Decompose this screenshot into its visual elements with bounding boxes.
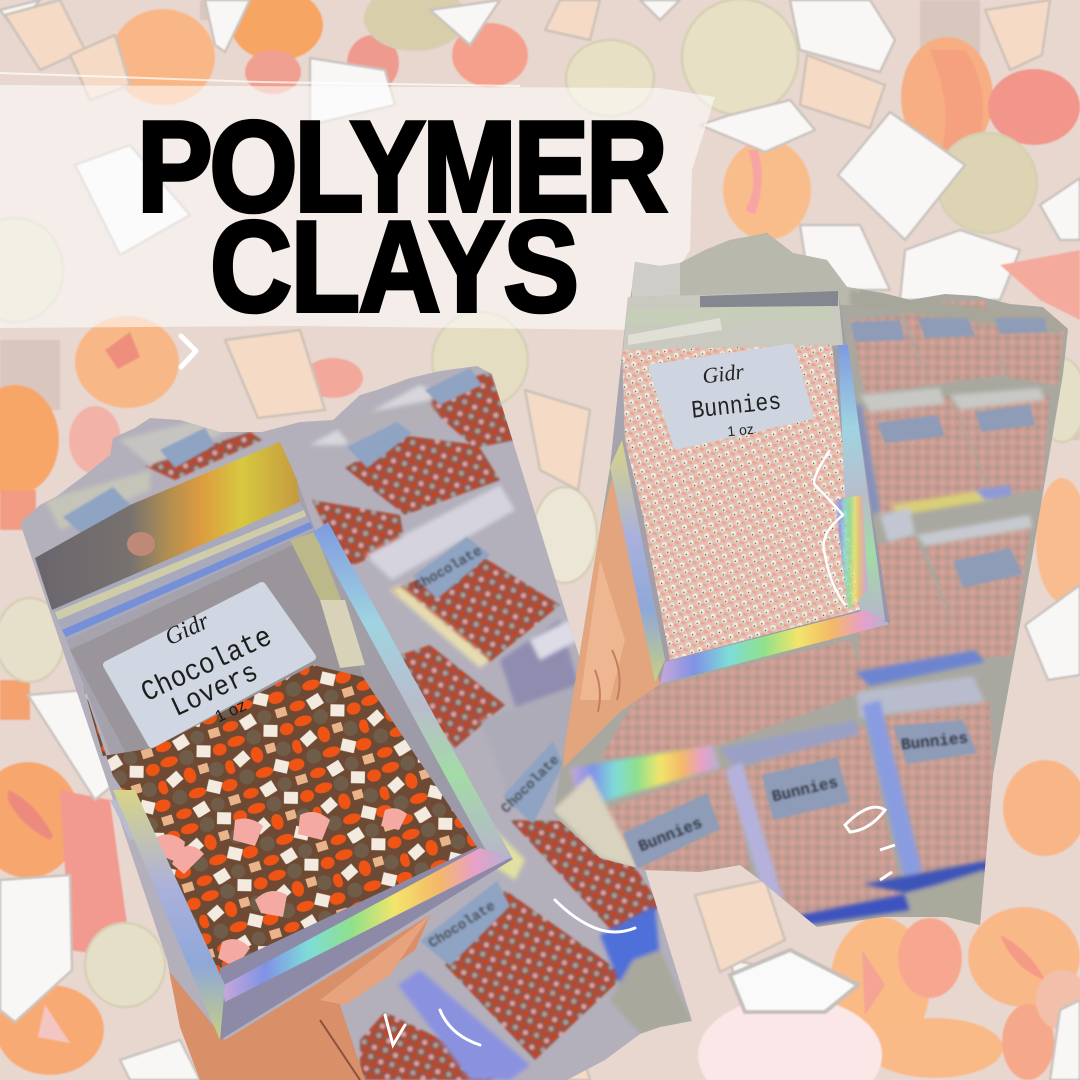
- foil highlights: [45, 385, 692, 1080]
- chocolate lovers label: [107, 586, 312, 744]
- chocolate lovers bag: [35, 442, 513, 1040]
- blurred label text: Bunnies: [636, 814, 705, 856]
- pink large clay heart: [698, 997, 882, 1080]
- title: [137, 94, 666, 339]
- translucent title band: [0, 85, 715, 330]
- crease highlight: [814, 450, 845, 605]
- blurred bunny bag contents: [585, 300, 1065, 925]
- label text: 1 oz: [212, 696, 249, 726]
- blurred labels: [623, 318, 1047, 869]
- hand: [160, 915, 430, 1080]
- icon: small chevron: [181, 336, 196, 367]
- label text: Gidr: [161, 608, 214, 651]
- blurred label text: Bunnies: [900, 730, 969, 754]
- thin white stroke above band: [0, 73, 520, 86]
- zip strip: [52, 502, 314, 640]
- label text: Gidr: [701, 359, 746, 388]
- right holographic edge: [313, 522, 513, 859]
- foil top tab: [35, 442, 300, 610]
- bunnies bag: [610, 291, 890, 684]
- blurred chocolate bag contents: [145, 372, 660, 1080]
- red clay corner: [1000, 250, 1080, 320]
- foil bottom strip: [660, 610, 890, 684]
- gap shading: [0, 0, 1080, 440]
- blurred label text: Chocolate: [498, 752, 563, 817]
- label text: Chocolate: [136, 621, 277, 710]
- bunnies label: [652, 347, 810, 446]
- label text: [690, 359, 783, 439]
- blurred label text: Chocolate: [426, 899, 499, 952]
- foil bottom strip: [220, 847, 513, 1040]
- holographic side strips: [838, 345, 885, 622]
- blurred label text: [636, 730, 969, 856]
- envelope over pink: [730, 950, 858, 1012]
- silver window: [70, 535, 364, 760]
- confetti fill: [622, 345, 860, 660]
- foil bands: [553, 290, 1068, 926]
- blurred label text: Bunnies: [770, 774, 840, 806]
- pink hearts: [155, 808, 407, 968]
- label text: 1 oz: [726, 421, 754, 439]
- panel: left photo, chocolate lovers: [0, 360, 700, 1080]
- panel: right photo, bunnies: [540, 230, 1080, 940]
- label text: Lovers: [167, 658, 263, 725]
- grey torn paper top: [680, 234, 860, 305]
- title: POLYMER: [137, 94, 666, 239]
- blurred label text: [412, 544, 563, 952]
- confetti fill: [83, 665, 477, 993]
- title: CLAYS: [210, 194, 578, 339]
- label text: Bunnies: [690, 387, 783, 426]
- foil top tab: [622, 291, 843, 360]
- white squiggles: [385, 900, 635, 1045]
- blurred labels: [63, 368, 563, 966]
- left holographic strip: [113, 790, 225, 1040]
- white squiggles: [845, 807, 895, 880]
- hand: [563, 478, 660, 768]
- blurred label text: Chocolate: [412, 544, 485, 595]
